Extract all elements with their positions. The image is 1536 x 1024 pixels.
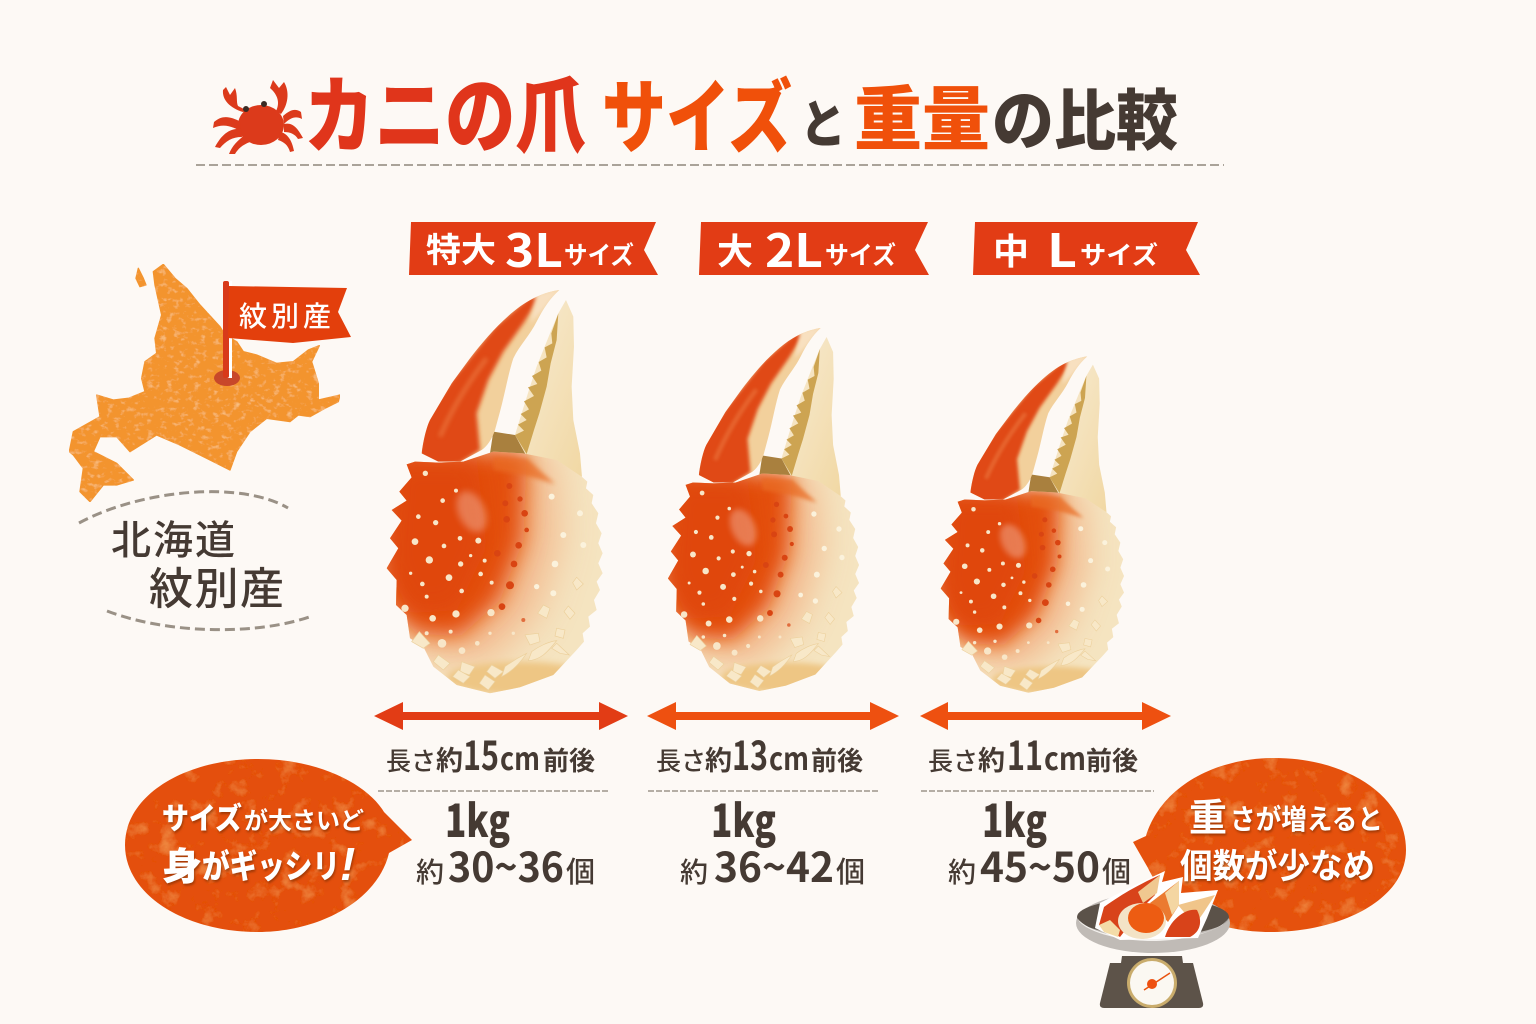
callout text: 身 [162,847,202,889]
length: 3L: 15 [463,724,499,782]
ribbon: L [973,215,1200,281]
ribbon: 3L [409,215,658,281]
crab claws on plate [1095,871,1218,940]
count: 2L: 約 [680,851,708,891]
panel: L size [920,215,1200,894]
length: L: 約 [978,739,1005,778]
length: 3L: cm [500,734,540,779]
flag marker: 紋別産 [239,295,331,335]
callout text: さが増えると [1230,803,1383,835]
bubble [1133,758,1406,932]
title: weight: 重量 [854,64,990,165]
title [213,50,1178,171]
ribbon: L: サイズ [1080,236,1158,272]
flag marker [214,281,351,386]
icon: crab [213,80,303,154]
bubble [125,759,412,932]
length: L: cm [1044,734,1086,779]
length: L: 11 [1007,724,1043,782]
length: 3L: 約 [436,739,463,778]
count: 3L: 個 [566,849,595,891]
count: 3L: 約 [416,851,444,891]
length: 2L: cm [769,734,809,779]
ribbon: 3L: 3L [505,215,563,281]
length: 2L: 長さ [656,742,706,778]
length: 2L: 約 [705,739,732,778]
panel: 3L size [374,215,658,894]
callout: bigger size is packed with meat [125,759,412,932]
length: 2L: 前後 [811,741,863,778]
ribbon: 2L: 大 [717,223,753,275]
length: 3L: 長さ [386,742,436,778]
ribbon: 2L: 2L [765,215,823,281]
claw photo: L [935,355,1124,694]
length: L: 長さ [928,742,978,778]
ribbon: 3L: サイズ [564,236,634,272]
length: 3L: 前後 [543,741,595,778]
claw photo: 2L [662,326,859,692]
map of Hokkaido [69,264,340,502]
panel: Hokkaido map [69,264,351,630]
count: L: 45~50 [980,834,1100,894]
callout text: ! [340,838,355,890]
count: 2L: 個 [836,849,865,891]
weight: L: 1kg [982,785,1047,850]
scale dial [1127,958,1177,1008]
title: size: サイズ [602,54,792,170]
ribbon: L: L [1047,215,1077,281]
scale plate [1076,893,1230,953]
count: 3L: 30~36 [448,834,564,894]
length: 2L: 13 [732,724,768,782]
count: L: 個 [1102,849,1131,891]
label: Hokkaido Monbetsu: 北海道 [111,508,235,566]
ribbon: 2L [699,215,929,281]
weight: 2L: 1kg [711,785,776,850]
callout text: 重 [1189,798,1227,840]
callout: heavier means fewer pieces [1133,758,1406,932]
count: 2L: 36~42 [714,834,834,894]
arrow: 3L length [374,702,628,730]
label: Hokkaido Monbetsu [79,492,312,630]
callout text: がギッシリ [202,848,340,885]
title: and: と [800,83,846,158]
title: crab claw: カニの爪 [304,50,586,171]
callout text: サイズ [162,802,242,836]
callout text [162,802,364,890]
callout text [1180,798,1383,886]
ribbon: 3L: 特大 [426,223,496,272]
panel: 2L size [647,215,929,894]
length: L: 前後 [1086,741,1138,778]
claw photo: 3L [380,288,603,695]
arrow: 2L length [647,702,899,730]
label: Hokkaido Monbetsu: 紋別産 [149,553,284,617]
callout text: 個数が少なめ [1180,847,1375,886]
scale base [1100,956,1203,1008]
arrow: L length [920,702,1171,730]
ribbon: 2L: サイズ [825,236,896,272]
weight: 3L: 1kg [445,785,510,850]
count: L: 約 [948,851,976,891]
icon: scale with crab claws [1076,871,1230,1008]
title: comparison: の比較 [992,68,1178,164]
ribbon: L: 中 [993,223,1029,275]
callout text: が大さいど [244,807,364,835]
